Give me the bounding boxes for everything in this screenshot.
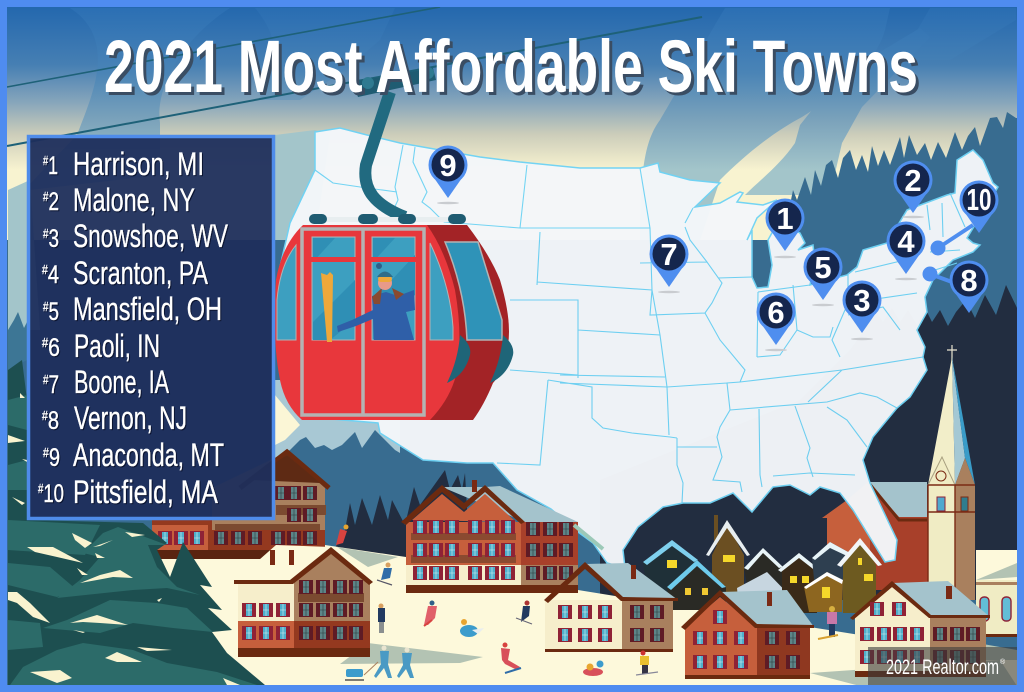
row 9: # bbox=[43, 445, 49, 460]
church with spire bbox=[928, 345, 975, 600]
row 10: # bbox=[38, 481, 44, 496]
pin 4: 4 bbox=[897, 224, 915, 259]
row 7: Boone, IA bbox=[74, 364, 169, 400]
row 9 bbox=[43, 437, 224, 473]
row 9: 9 bbox=[49, 444, 60, 472]
red house bbox=[681, 590, 814, 679]
cable carriage bbox=[353, 67, 436, 97]
row 1: 1 bbox=[48, 152, 58, 180]
row 2: # bbox=[43, 189, 49, 204]
row 4: 4 bbox=[48, 261, 59, 289]
right door window bbox=[372, 237, 415, 340]
tree silhouette bbox=[8, 360, 265, 686]
pin 7: 7 bbox=[660, 237, 678, 272]
pin 8: 8 bbox=[960, 263, 978, 298]
row 4: Scranton, PA bbox=[73, 255, 208, 291]
row 5: # bbox=[43, 299, 49, 314]
house at center right bbox=[544, 525, 678, 652]
map outline bbox=[277, 128, 998, 568]
row 8: 8 bbox=[48, 407, 59, 435]
row 6: 6 bbox=[48, 334, 60, 362]
pin 9: 9 bbox=[439, 148, 457, 183]
pin 7 bbox=[650, 234, 688, 293]
state borders bbox=[315, 145, 965, 503]
building behind Florida bbox=[822, 482, 928, 590]
side window left bbox=[277, 245, 296, 340]
pin 2: 2 bbox=[904, 163, 922, 198]
row 7: # bbox=[43, 372, 49, 387]
pin 6: 6 bbox=[767, 295, 785, 330]
snowboarder pink bbox=[424, 600, 437, 626]
cable lines bbox=[7, 7, 702, 146]
rear side window bbox=[445, 242, 502, 340]
row 5: Mansfield, OH bbox=[73, 291, 222, 327]
row 2: Malone, NY bbox=[73, 182, 195, 218]
central hotel bbox=[401, 480, 578, 593]
row 1 bbox=[43, 146, 204, 182]
panel: ranking list bbox=[28, 136, 274, 518]
toboggan kids bbox=[583, 660, 604, 676]
snowy ground bbox=[8, 545, 1017, 692]
row 6: # bbox=[42, 335, 49, 350]
row 5 bbox=[43, 291, 222, 327]
door fins bbox=[447, 335, 513, 383]
row 10: 10 bbox=[43, 480, 64, 508]
pin 2 bbox=[894, 160, 932, 218]
row 8: # bbox=[42, 408, 48, 423]
row 4 bbox=[42, 255, 208, 291]
transom bars bbox=[308, 257, 419, 262]
row 3: 3 bbox=[48, 225, 59, 253]
cross-country skier two bbox=[397, 648, 414, 678]
cream house right bbox=[850, 581, 990, 677]
pin 5: 5 bbox=[814, 250, 832, 285]
row 10 bbox=[38, 474, 219, 510]
skier pink suit bbox=[501, 642, 521, 673]
pin 1: 1 bbox=[776, 201, 794, 236]
row 3: # bbox=[43, 226, 49, 241]
house with tall chimneys bbox=[234, 545, 373, 657]
ocean forest silhouette bbox=[600, 285, 1024, 600]
credit label: ® bbox=[1000, 658, 1006, 666]
map of contiguous United States bbox=[277, 128, 998, 568]
row 2 bbox=[43, 182, 195, 218]
row 3 bbox=[43, 218, 228, 254]
skier pink jacket bbox=[818, 606, 838, 639]
left door window bbox=[312, 237, 355, 340]
row 8: Vernon, NJ bbox=[74, 400, 187, 436]
lighter tree tiers bbox=[8, 395, 257, 685]
cabin rear body bbox=[420, 225, 509, 420]
row 4: # bbox=[42, 262, 48, 277]
row 10: Pittsfield, MA bbox=[73, 474, 219, 510]
pin 5 bbox=[804, 248, 842, 306]
row 1: # bbox=[43, 153, 49, 168]
door frame bbox=[302, 229, 424, 415]
pin 10: 10 bbox=[966, 182, 992, 217]
side window right bbox=[430, 243, 453, 340]
top rail bbox=[309, 214, 466, 224]
row 8 bbox=[42, 400, 187, 436]
skier yellow bbox=[636, 650, 658, 675]
chalets behind the houses bbox=[643, 515, 882, 620]
pin 1 bbox=[766, 198, 804, 258]
panel background bbox=[28, 136, 274, 518]
chapel at right edge bbox=[976, 550, 1017, 637]
blue sled bbox=[345, 662, 378, 680]
pin connectors bbox=[923, 225, 973, 282]
map pins bbox=[428, 146, 998, 351]
pin 9 bbox=[428, 146, 468, 204]
pin 3: 3 bbox=[853, 283, 871, 318]
ground shadows bbox=[337, 547, 1017, 686]
skiers and sledders on the slope bbox=[336, 524, 838, 680]
pin 3 bbox=[842, 280, 882, 340]
snow patches bbox=[8, 393, 240, 685]
row 5: 5 bbox=[48, 298, 59, 326]
standing skier navy bbox=[378, 604, 385, 633]
skier red jacket bbox=[336, 524, 348, 545]
distant hotel left bbox=[152, 452, 329, 559]
row 3: Snowshoe, WV bbox=[73, 218, 228, 254]
skier blue bbox=[377, 562, 392, 585]
skier dark bbox=[516, 600, 532, 624]
row 9: Anaconda, MT bbox=[73, 437, 224, 473]
row 7 bbox=[43, 364, 169, 400]
row 2: 2 bbox=[48, 188, 59, 216]
hanger arm bbox=[365, 92, 405, 217]
fir trees foreground bbox=[8, 360, 265, 686]
cross-country skier one bbox=[374, 646, 392, 678]
row 1: Harrison, MI bbox=[73, 146, 204, 182]
credit label bbox=[868, 647, 1017, 686]
rider waving bbox=[337, 263, 415, 340]
cabin front body bbox=[275, 225, 459, 420]
row 6 bbox=[42, 328, 160, 364]
row 6: Paoli, IN bbox=[74, 328, 160, 364]
pin 6 bbox=[756, 292, 796, 351]
west forest silhouette bbox=[335, 470, 470, 560]
sledder blue bbox=[460, 619, 484, 637]
pin 10 bbox=[960, 180, 998, 233]
skis held by rider bbox=[321, 272, 333, 342]
mountains behind the map bbox=[8, 112, 1024, 560]
row 7: 7 bbox=[48, 371, 59, 399]
gondola cabin bbox=[275, 67, 513, 420]
pin 4 bbox=[886, 222, 926, 280]
pin 8 bbox=[950, 260, 988, 313]
